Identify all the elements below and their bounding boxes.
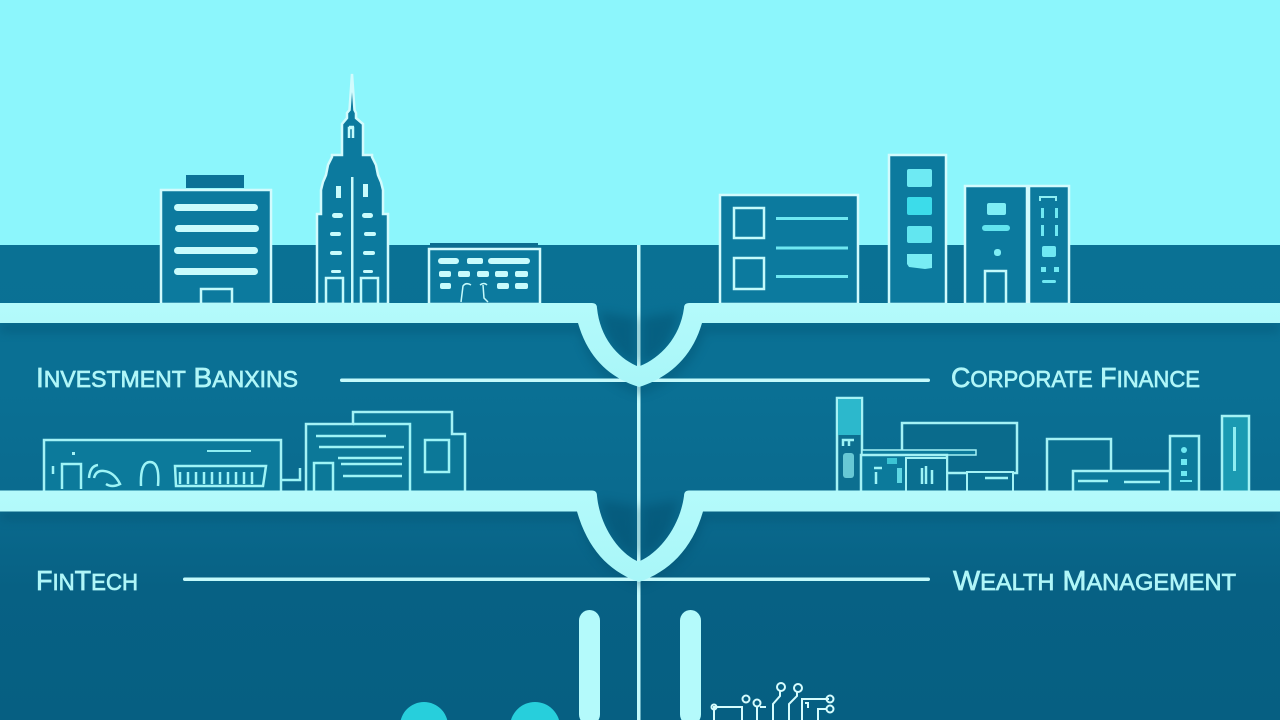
building: slim right tower: [1222, 416, 1249, 492]
connector pipe: [281, 468, 300, 480]
shelf shadows: [0, 312, 1280, 586]
mid-right buildings: [837, 398, 1249, 492]
label: FinTech: FINTECH: [36, 565, 138, 596]
skyline: left buildings: [161, 74, 540, 304]
label: Corporate Finance: CORPORATE FINANCE: [951, 362, 1200, 393]
mid-left buildings: [44, 412, 465, 492]
building: wide office: [720, 195, 858, 304]
label: Wealth Management: WEALTH MANAGEMENT: [953, 565, 1236, 596]
icon: teal domes: [400, 702, 560, 720]
lower connector line: [183, 578, 930, 581]
building: stacked office: [306, 412, 465, 492]
building: small dotted tower: [1170, 436, 1199, 492]
building: office block: [161, 175, 271, 304]
dark ground band: [0, 245, 1280, 720]
label: Investment Banking: INVESTMENT BANXINS: [36, 362, 298, 393]
building: teal-topped tower: [837, 398, 862, 492]
pipe: left pillar: [579, 610, 600, 720]
building: spire tower: [317, 74, 388, 304]
icon: circuit traces: [712, 683, 834, 720]
upper connector lines: [340, 378, 930, 382]
building: flat annex: [1047, 439, 1171, 492]
skyline: right buildings: [720, 155, 1069, 304]
building: tall tower: [889, 155, 946, 304]
building: factory group: [861, 423, 1017, 492]
shelf 1 with U connector: [0, 303, 1280, 387]
sky background: [0, 0, 1280, 246]
building: door tower: [965, 186, 1027, 304]
pipe: right pillar: [680, 610, 701, 720]
building: narrow tower: [1029, 186, 1069, 304]
central vertical line: [637, 245, 640, 720]
building: long bank hall: [44, 440, 281, 492]
shelf 2 with U connector: [0, 490, 1280, 582]
building: low bank: [429, 243, 540, 304]
